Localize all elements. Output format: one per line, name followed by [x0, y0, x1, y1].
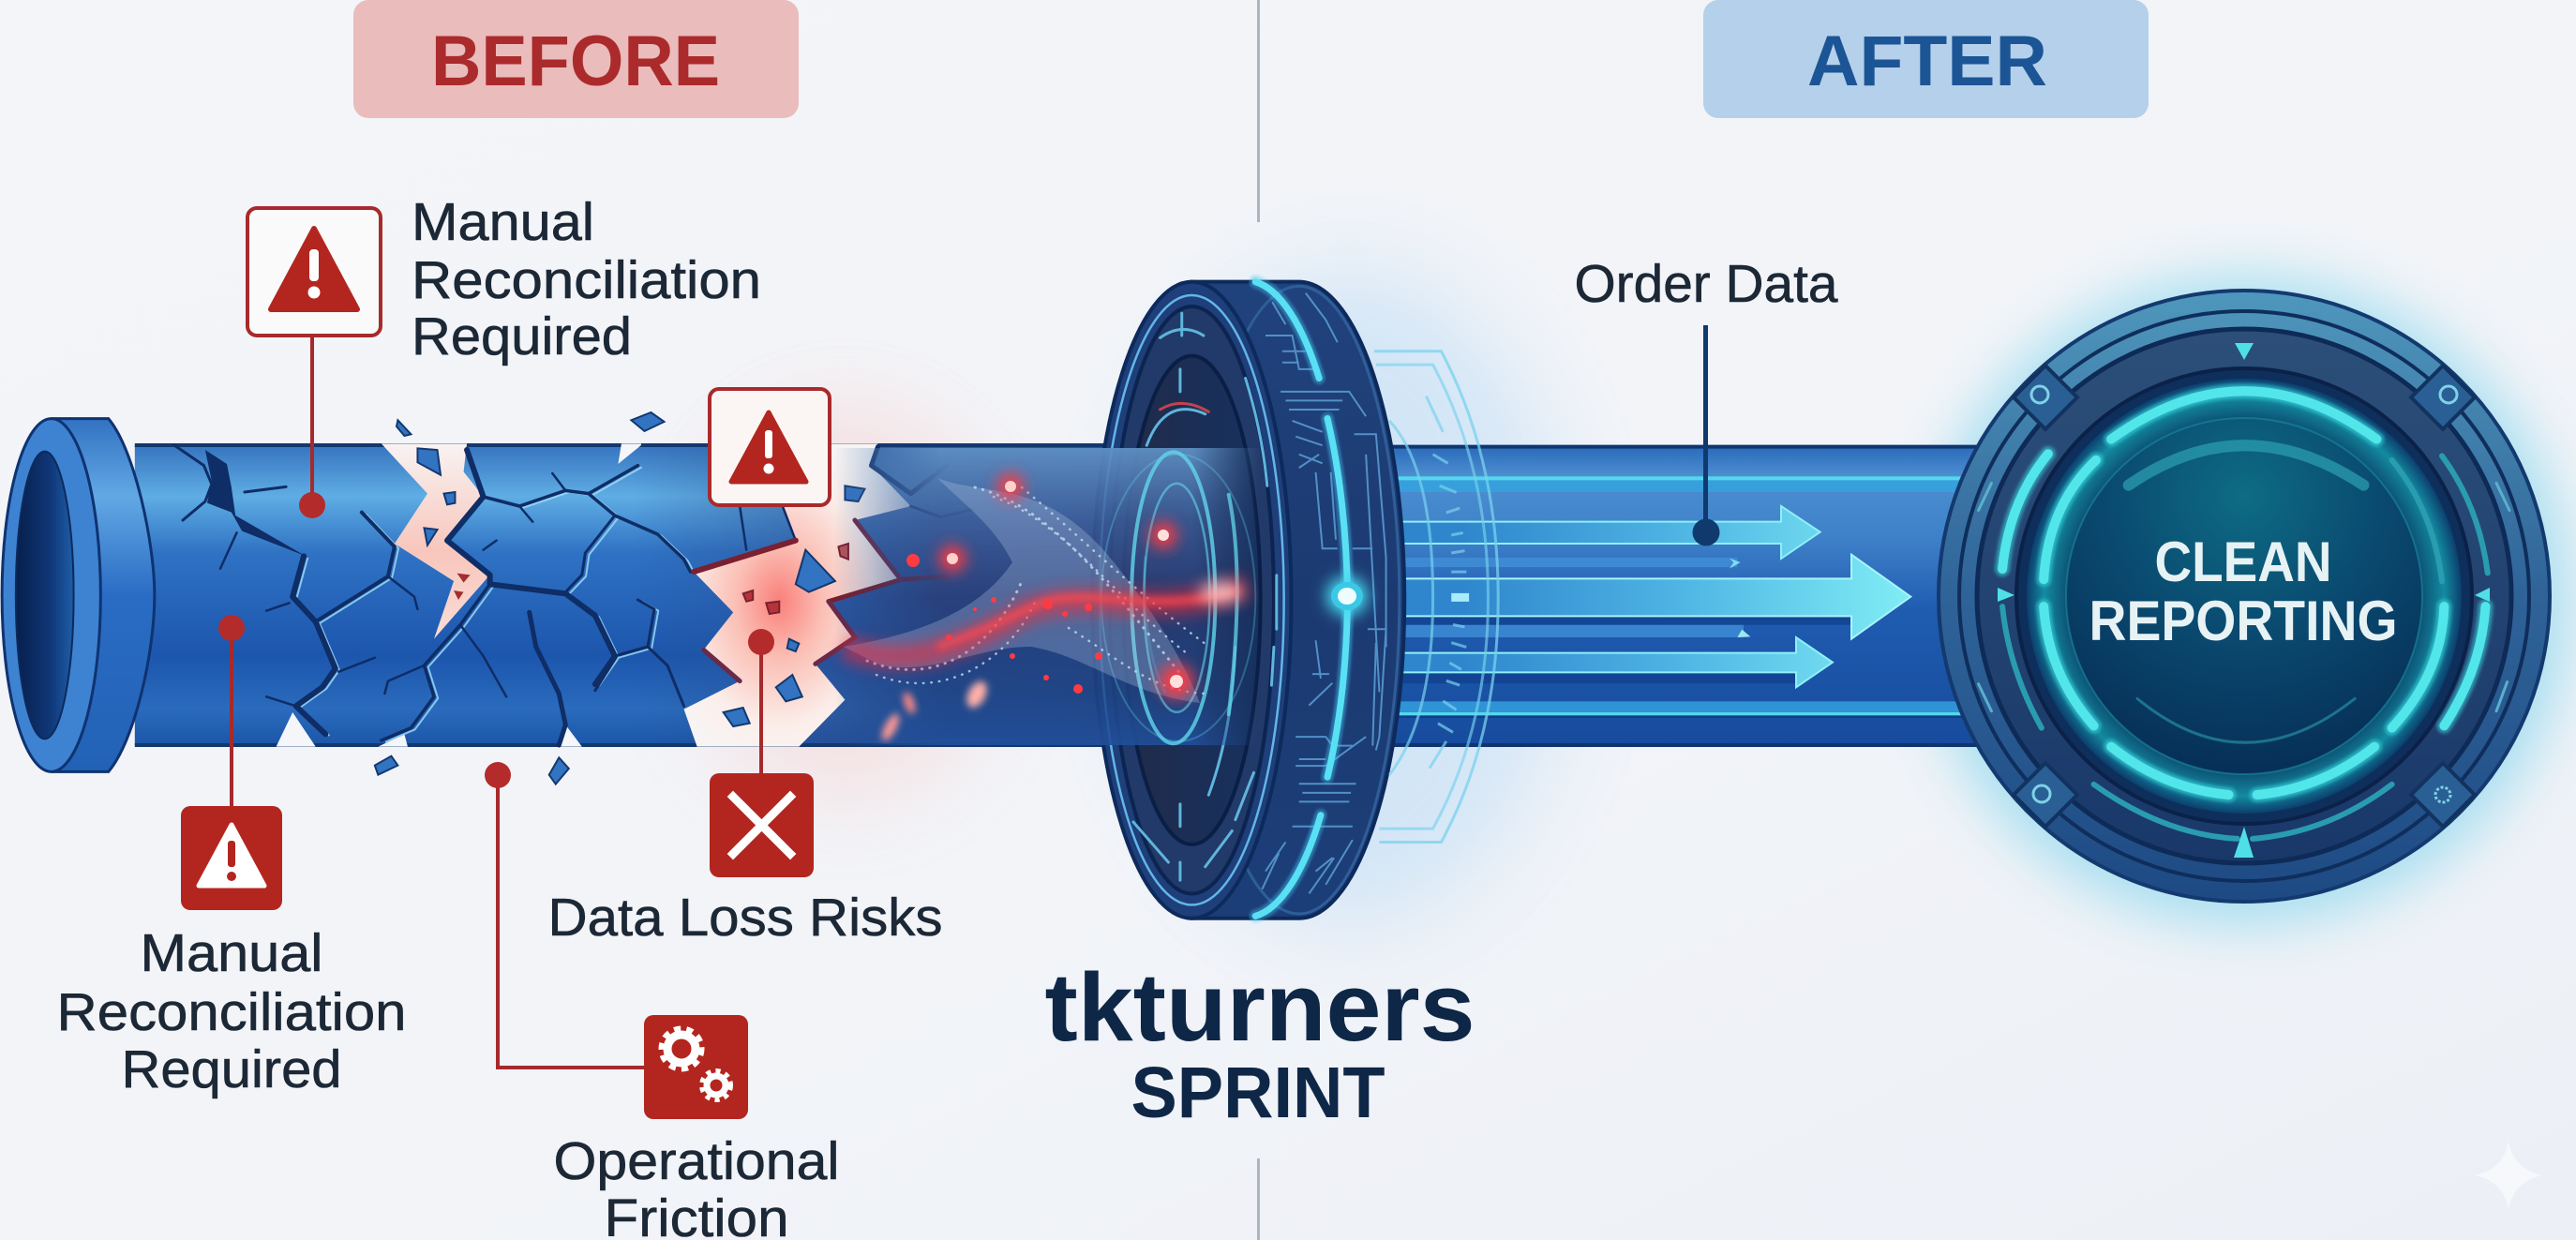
callout: data loss risks: Data Loss Risks [547, 888, 943, 948]
red flow [844, 586, 1247, 657]
crack highlights [296, 467, 695, 742]
holographic rings [1101, 452, 1255, 743]
callout: manual reconciliation bottom [56, 615, 407, 1099]
red sparks [878, 473, 1193, 743]
arrow: thin upper [1730, 559, 1741, 569]
front face [1092, 282, 1291, 919]
icon: warning [199, 825, 264, 886]
icon: warning [271, 229, 357, 309]
callout: manual reconciliation bottom: Required [122, 1039, 341, 1099]
badge: before: BEFORE [431, 22, 720, 101]
arrow: bottom [1387, 637, 1833, 687]
callout: manual reconciliation top: Required [412, 306, 632, 366]
translucent tube [834, 448, 1261, 745]
particle ribbon [844, 478, 1200, 703]
divider bottom [1257, 1158, 1260, 1240]
dial triangles [1998, 343, 2490, 858]
broken pipe [2, 412, 1108, 784]
callout: order data: Order Data [1575, 254, 1838, 314]
dial tab symbols [2031, 386, 2457, 802]
callout: manual reconciliation top [247, 192, 761, 518]
dial band [1977, 329, 2511, 863]
flange [2, 419, 155, 771]
pipe cracks [174, 445, 973, 745]
callout: operational friction [485, 762, 840, 1240]
clean reporting dial [1939, 291, 2550, 902]
callout: warning box on pipe [710, 389, 830, 505]
icon: warning [731, 412, 806, 482]
tkturners sprint ring [1092, 282, 1404, 919]
callout: manual reconciliation bottom: Manual [141, 923, 322, 983]
callout: manual reconciliation top: Reconciliation [412, 250, 761, 310]
badge: after [1703, 0, 2149, 118]
ghost arcs and ticks right of ring [1374, 351, 1498, 842]
arrow: thin lower [1737, 630, 1750, 637]
title: tkturners sprint [1044, 953, 1475, 1133]
dial outer ring [1939, 291, 2550, 902]
particle trails [867, 487, 1209, 694]
callout: order data [1575, 254, 1838, 545]
ring glowing node [1326, 576, 1368, 616]
callout: operational friction: Operational [553, 1131, 840, 1191]
badge: after: AFTER [1807, 22, 2047, 101]
face details [1133, 313, 1277, 880]
arrow: middle [1387, 555, 1910, 639]
icon: sparkle watermark [2475, 1142, 2542, 1209]
tick marks [1426, 396, 1466, 769]
arrow: top [1387, 506, 1820, 559]
pipe body [135, 445, 1108, 745]
soft glows behind the pipeline [684, 268, 2568, 924]
white flare [1200, 581, 1241, 604]
right pipe with clean data stream [1387, 447, 2044, 745]
data stream inside tube [844, 473, 1247, 743]
dial glow ring [2027, 379, 2462, 814]
callout: data loss risks [547, 629, 943, 948]
cyan light strip [1255, 282, 1347, 916]
title: tkturners sprint: SPRINT [1131, 1053, 1385, 1133]
callout: manual reconciliation top: Manual [412, 192, 594, 252]
light bands [1387, 476, 2044, 718]
title: tkturners sprint: tkturners [1044, 953, 1475, 1061]
badge: before [353, 0, 799, 118]
icon: gears [662, 1029, 730, 1099]
dial core [2066, 418, 2422, 774]
fragments [375, 412, 864, 784]
dial label: CLEAN [2154, 530, 2332, 593]
clean reporting dial: REPORTING [2089, 590, 2398, 652]
ring body [1191, 282, 1404, 919]
dial arcs [1979, 391, 2509, 839]
dial corner tabs [2014, 366, 2475, 827]
divider top [1257, 0, 1260, 222]
callout: manual reconciliation bottom: Reconciliation [56, 982, 407, 1042]
icon: x mark [733, 797, 790, 854]
gaps in pipe [277, 443, 911, 747]
circuit lines [1262, 293, 1386, 893]
